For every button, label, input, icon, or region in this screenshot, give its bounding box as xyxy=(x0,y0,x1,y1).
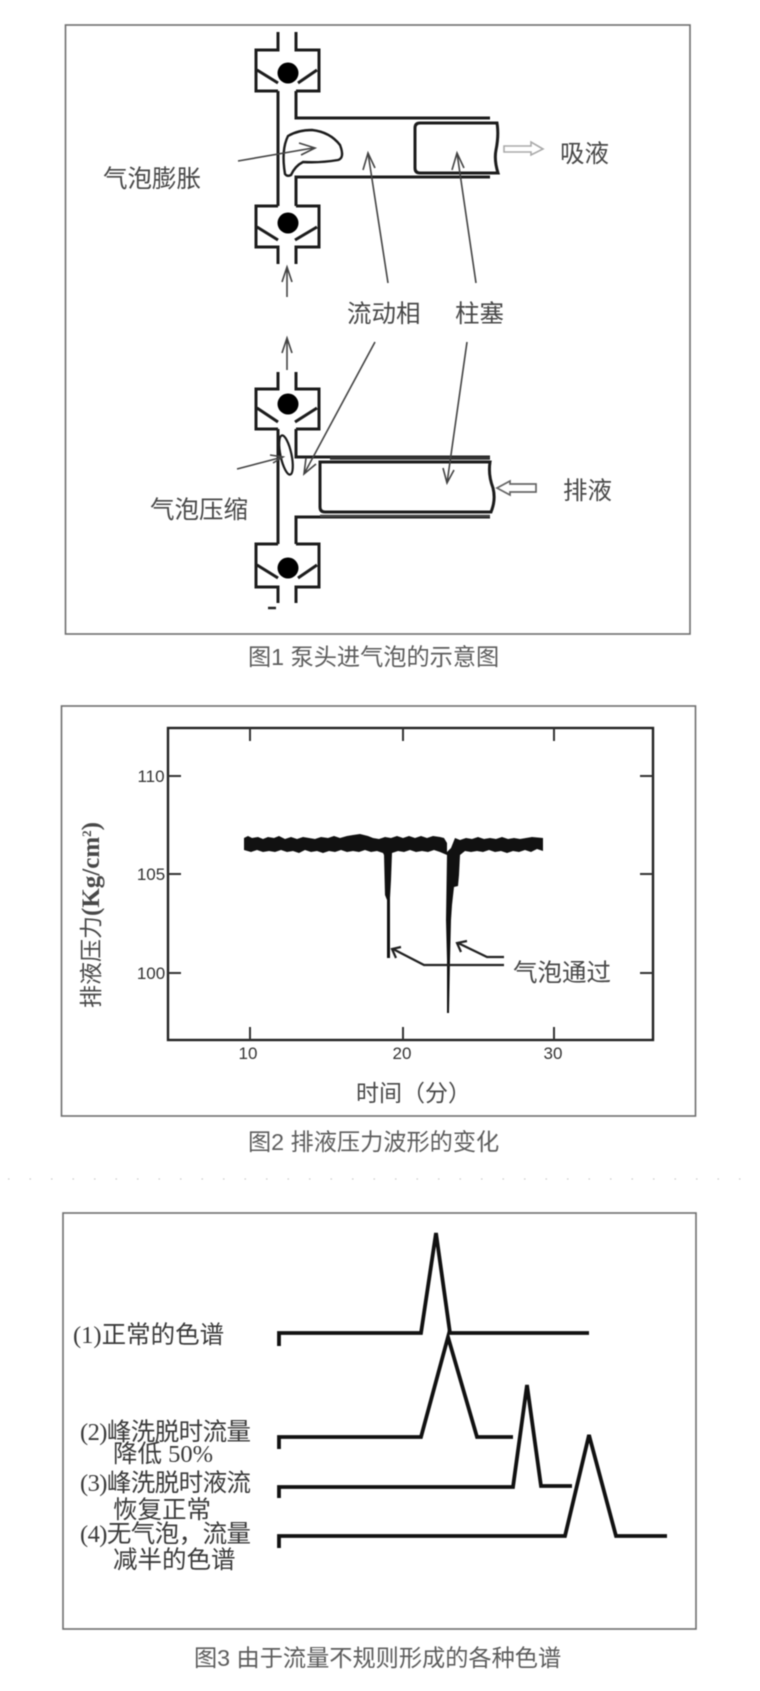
arrow: flow into upper pump xyxy=(282,267,292,297)
arrow: mobile phase downward xyxy=(304,342,375,474)
caption: figure 2: 图2 排液压力波形的变化 xyxy=(248,1129,499,1155)
lower inlet valve of upper pump xyxy=(256,206,319,264)
x axis tick labels: 10 xyxy=(239,1044,257,1063)
x axis tick labels: 30 xyxy=(544,1044,562,1063)
panel: figure 1 pump head diagram xyxy=(66,25,690,634)
inlet valve of lower pump xyxy=(256,544,319,603)
compressed air bubble xyxy=(276,434,296,476)
pressure trace with two dips xyxy=(244,834,543,1013)
dotted divider xyxy=(8,1178,760,1180)
lower plunger xyxy=(320,462,494,512)
label 4 xyxy=(80,1520,251,1574)
upper plunger xyxy=(415,123,498,173)
y axis tick labels: 110 xyxy=(137,767,165,786)
arrow: label to compressed bubble xyxy=(237,455,283,469)
label 3 xyxy=(80,1469,251,1524)
top outlet valve xyxy=(256,32,319,91)
label: suction: 吸液 xyxy=(560,140,609,168)
label 2: (2)峰洗脱时流量 xyxy=(80,1418,251,1446)
label: bubble passing: 气泡通过 xyxy=(513,959,611,987)
trace 4: no bubble, half flow xyxy=(279,1435,667,1548)
panel: figure 3 chromatograms xyxy=(63,1213,696,1629)
hollow arrow: suction xyxy=(504,142,543,155)
arrow: label to expanded bubble xyxy=(238,143,315,161)
label 4: (4)无气泡，流量 xyxy=(80,1520,251,1548)
trace 1: normal chromatogram xyxy=(279,1233,589,1346)
caption: figure 1: 图1 泵头进气泡的示意图 xyxy=(248,644,499,670)
label: bubble compression: 气泡压缩 xyxy=(150,496,248,524)
upper pump channel walls xyxy=(278,91,490,206)
y axis title: ) xyxy=(78,822,105,830)
label 4: 减半的色谱 xyxy=(113,1546,236,1574)
y axis tick labels xyxy=(137,767,165,983)
label 3: (3)峰洗脱时液流 xyxy=(80,1469,251,1497)
label 2: 降低 50% xyxy=(113,1440,213,1468)
x axis title: 时间（分） xyxy=(356,1080,471,1106)
label 1: (1)正常的色谱 xyxy=(73,1321,224,1349)
label 3: 恢复正常 xyxy=(113,1496,211,1524)
hollow arrow: discharge xyxy=(497,481,536,495)
lower pump assembly (discharge) xyxy=(256,372,494,608)
label: bubble expansion: 气泡膨胀 xyxy=(103,165,201,193)
y axis title: 排液压力(Kg/cm xyxy=(78,837,105,1008)
y axis tick labels: 100 xyxy=(137,964,165,983)
arrow: plunger downward xyxy=(443,342,467,483)
trace 2: flow reduced by 50 percent xyxy=(279,1337,513,1449)
x axis tick labels: 20 xyxy=(393,1044,411,1063)
panel: figure 2 discharge pressure chart xyxy=(62,706,696,1116)
label 2 xyxy=(80,1418,251,1468)
upper pump assembly (intake) xyxy=(256,32,498,264)
outlet valve of lower pump xyxy=(256,372,319,429)
y axis tick labels: 105 xyxy=(137,865,165,884)
chart plot area with ticks xyxy=(168,728,653,1040)
arrow: mobile phase upward xyxy=(363,153,388,283)
y axis title: 2 xyxy=(79,830,94,837)
trace 3: flow restored during elution xyxy=(279,1385,572,1498)
expanded air bubble xyxy=(284,130,342,176)
lower pump channel walls xyxy=(278,429,490,544)
callout arrows to dips xyxy=(392,941,504,965)
arrow: plunger upward xyxy=(452,153,476,283)
arrow: flow out of lower pump xyxy=(282,338,292,370)
label: mobile phase: 流动相 xyxy=(347,300,420,328)
x axis tick labels xyxy=(239,1044,562,1063)
caption: figure 3: 图3 由于流量不规则形成的各种色谱 xyxy=(194,1645,561,1671)
label: discharge: 排液 xyxy=(563,477,612,505)
label: plunger: 柱塞 xyxy=(455,300,504,328)
